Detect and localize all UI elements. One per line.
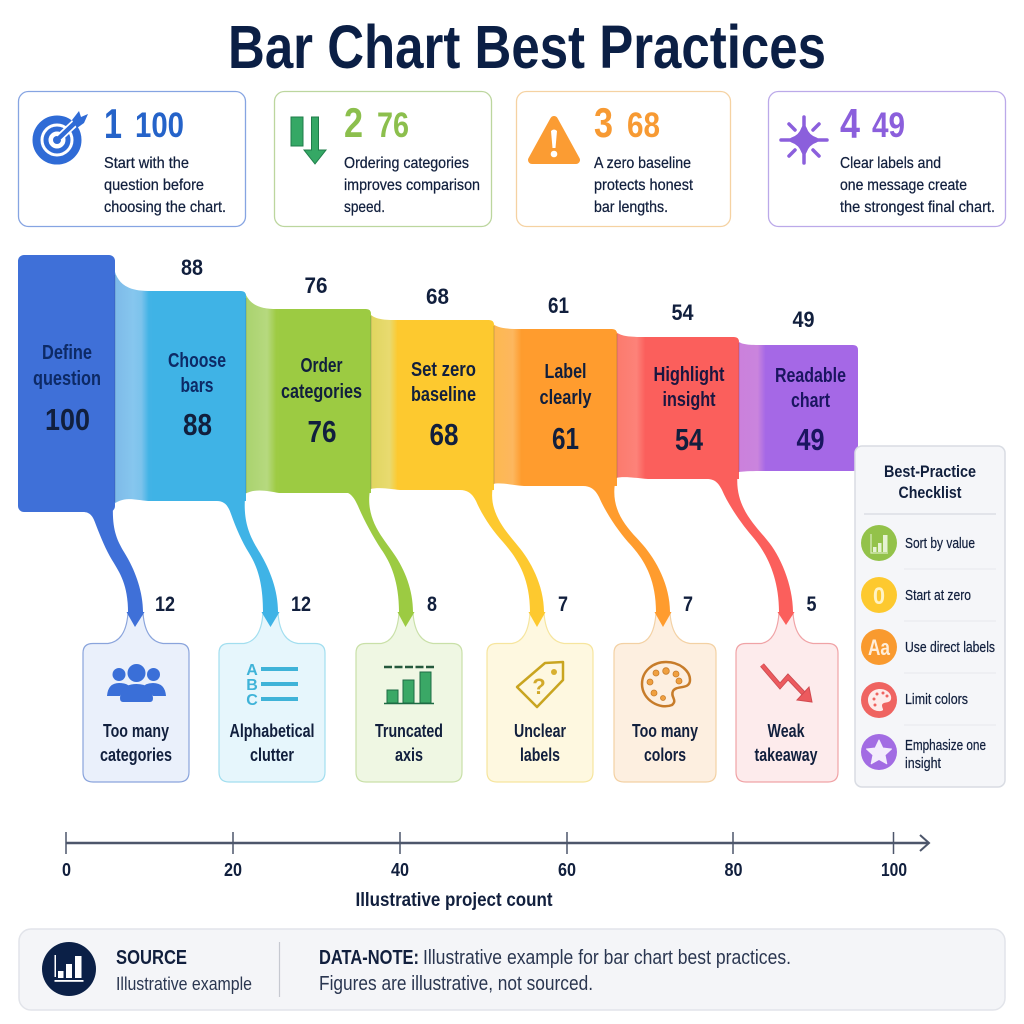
- checklist item: limit colors: Limit colors: [905, 692, 968, 708]
- checklist item: start at zero: Start at zero: [905, 588, 971, 604]
- bar: readable chart: 49: [796, 422, 824, 457]
- callout: too many categories: categories: [100, 744, 172, 765]
- panel: takeaway card 3: [516, 92, 730, 226]
- bar: readable chart: chart: [791, 390, 830, 412]
- callout: weak takeaway: takeaway: [754, 744, 818, 765]
- step number: 1: [104, 100, 122, 147]
- bar: label clearly: 61: [552, 421, 579, 456]
- bar: highlight insight: [648, 337, 739, 479]
- card text: A zero baseline: [594, 155, 691, 172]
- bar: readable chart: Readable: [775, 365, 846, 387]
- drop-off flow: too many colors: [583, 478, 672, 627]
- checklist item: use direct labels: [861, 629, 995, 665]
- panel: takeaway card 2: [274, 92, 492, 226]
- icon: insight burst: [781, 117, 827, 163]
- axis tick labels: 0: [62, 860, 71, 880]
- icon: target: [36, 111, 88, 160]
- axis tick labels: 20: [224, 860, 242, 880]
- callout: truncated axis: [356, 613, 462, 782]
- callout: weak takeaway: [736, 613, 838, 782]
- icon: abc list: [246, 662, 298, 709]
- card text: the strongest final chart.: [840, 199, 995, 216]
- x axis: [62, 832, 929, 911]
- checklist heading: Checklist: [898, 483, 962, 502]
- axis tick labels: 60: [558, 860, 576, 880]
- card text: [104, 155, 226, 216]
- panel: source and data note: [19, 929, 1005, 1010]
- icon: falling arrow: [762, 665, 812, 702]
- bar: choose bars: bars: [180, 375, 214, 397]
- step value: 100: [135, 106, 184, 145]
- card text: speed.: [344, 199, 385, 216]
- card text: [344, 155, 480, 216]
- callout: alphabetical clutter: clutter: [250, 744, 294, 765]
- icon: abc list: B: [246, 677, 258, 694]
- panel: takeaway card 1: [18, 92, 246, 226]
- checklist item: emphasize one insight: [861, 734, 986, 772]
- callout: unclear labels: Unclear: [514, 720, 566, 741]
- callout: truncated axis: axis: [395, 744, 423, 765]
- remaining value labels: 49: [792, 307, 814, 332]
- drop-off value labels: 12: [155, 593, 175, 616]
- callout: unclear labels: labels: [520, 744, 560, 765]
- bar: label clearly: Label: [544, 361, 586, 383]
- step value: 49: [872, 106, 905, 145]
- checklist item: start at zero: 0: [873, 583, 885, 610]
- card text: improves comparison: [344, 177, 480, 194]
- drop-off flow: alphabetical clutter: [217, 498, 280, 627]
- card text: choosing the chart.: [104, 199, 226, 216]
- axis title: Illustrative project count: [356, 889, 553, 911]
- bar: order categories: [279, 309, 371, 493]
- axis tick labels: [62, 860, 907, 880]
- drop-off flow: too many categories: [83, 505, 144, 627]
- callout: too many colors: Too many: [632, 720, 699, 741]
- bar: choose bars: Choose: [168, 350, 226, 372]
- step value: 68: [627, 106, 660, 145]
- checklist item: limit colors: [861, 682, 968, 718]
- drop-off value labels: 7: [558, 593, 568, 616]
- step number: 3: [594, 99, 613, 146]
- drop-off value labels: 12: [291, 593, 311, 616]
- card text: protects honest: [594, 177, 693, 194]
- remaining value labels: 61: [548, 293, 569, 318]
- data note: DATA-NOTE:: [319, 947, 419, 969]
- bar: label clearly: clearly: [540, 387, 592, 409]
- source label: [116, 947, 252, 994]
- remaining value labels: 68: [426, 284, 449, 309]
- source label: Illustrative example: [116, 974, 252, 994]
- callout: too many categories: Too many: [103, 720, 170, 741]
- drop-off value labels: 5: [806, 593, 817, 616]
- bar: set zero baseline: 68: [430, 417, 458, 452]
- drop-off value labels: 8: [427, 593, 437, 616]
- icon: people: [107, 664, 166, 702]
- remaining value labels: 88: [181, 255, 203, 280]
- step number: 4: [840, 100, 861, 147]
- drop-off flow: weak takeaway: [707, 471, 794, 625]
- data note: Figures are illustrative, not sourced.: [319, 973, 593, 995]
- checklist heading: Best-Practice: [884, 462, 976, 481]
- bar: label clearly: [524, 329, 617, 486]
- checklist item: use direct labels: Aa: [868, 635, 891, 660]
- data note: [319, 947, 791, 995]
- checklist heading: [884, 462, 976, 502]
- icon: source chart: [42, 942, 96, 996]
- panel: best-practice checklist: [855, 446, 1005, 787]
- drop-off value labels: 7: [683, 593, 693, 616]
- callout: weak takeaway: Weak: [768, 720, 805, 741]
- bar: highlight insight: Highlight: [654, 364, 725, 386]
- callout: unclear labels: [487, 613, 593, 782]
- icon: truncated bars: [384, 667, 434, 704]
- card text: question before: [104, 177, 204, 194]
- bar: set zero baseline: baseline: [411, 384, 476, 406]
- card text: Start with the: [104, 155, 189, 172]
- checklist item: sort by value: Sort by value: [905, 536, 975, 552]
- bar: define question: Define: [42, 342, 92, 364]
- connectors between bars: [114, 268, 768, 504]
- bar: order categories: categories: [281, 381, 362, 403]
- data note: Illustrative example for bar chart best practices.: [423, 947, 791, 969]
- icon: descending bar and arrow: [291, 117, 326, 164]
- card text: Ordering categories: [344, 155, 469, 172]
- checklist item: sort by value: [861, 525, 975, 561]
- icon: abc list: C: [246, 692, 258, 709]
- callout: too many categories: [83, 613, 189, 782]
- icon: question tag: ?: [532, 674, 546, 699]
- card text: bar lengths.: [594, 199, 668, 216]
- remaining value labels: 76: [304, 273, 328, 298]
- panel: takeaway card 4: [768, 92, 1006, 226]
- callout: alphabetical clutter: Alphabetical: [230, 720, 314, 741]
- axis tick labels: 80: [724, 860, 742, 880]
- drop-off value labels: [155, 593, 817, 616]
- callout boxes row: [83, 613, 838, 782]
- remaining value labels: [181, 255, 814, 332]
- callout: truncated axis: Truncated: [375, 720, 443, 741]
- icon: question tag: [517, 662, 563, 707]
- checklist item: use direct labels: Use direct labels: [905, 640, 995, 656]
- card text: [840, 155, 995, 216]
- callout: too many colors: colors: [644, 744, 686, 765]
- bar: order categories: 76: [308, 414, 336, 449]
- checklist item: start at zero: [861, 577, 971, 613]
- bar: define question: 100: [45, 402, 90, 437]
- bar: define question: [18, 255, 115, 512]
- card text: [594, 155, 693, 216]
- drop-off flow: unclear labels: [460, 482, 546, 627]
- icon: abc list: A: [246, 662, 258, 679]
- axis line: [66, 832, 929, 854]
- bar: choose bars: 88: [183, 407, 212, 442]
- remaining value labels: 54: [672, 300, 694, 325]
- callout: alphabetical clutter: [219, 613, 325, 782]
- card text: Clear labels and: [840, 155, 941, 172]
- bar: readable chart: [768, 345, 858, 471]
- bar: order categories: Order: [300, 355, 343, 377]
- checklist item: emphasize one insight: Emphasize one: [905, 738, 986, 754]
- bar: highlight insight: insight: [662, 389, 716, 411]
- bar: highlight insight: 54: [675, 422, 704, 457]
- bar: set zero baseline: [400, 320, 494, 490]
- card text: one message create: [840, 177, 967, 194]
- step value: 76: [377, 106, 409, 145]
- callout: too many colors: [614, 613, 716, 782]
- step number: 2: [344, 99, 363, 146]
- source label: SOURCE: [116, 947, 187, 969]
- icon: warning triangle: [532, 120, 576, 160]
- bar: choose bars: [152, 291, 246, 501]
- axis tick labels: 40: [391, 860, 409, 880]
- sankey flow chart: [18, 255, 858, 627]
- icon: palette: [642, 662, 690, 706]
- axis tick labels: 100: [881, 860, 907, 880]
- title: Bar Chart Best Practices: [228, 13, 826, 81]
- bar: set zero baseline: Set zero: [411, 359, 476, 381]
- drop-off flow: truncated axis: [343, 490, 414, 627]
- checklist item: emphasize one insight: insight: [905, 756, 941, 772]
- bar: define question: question: [33, 368, 101, 390]
